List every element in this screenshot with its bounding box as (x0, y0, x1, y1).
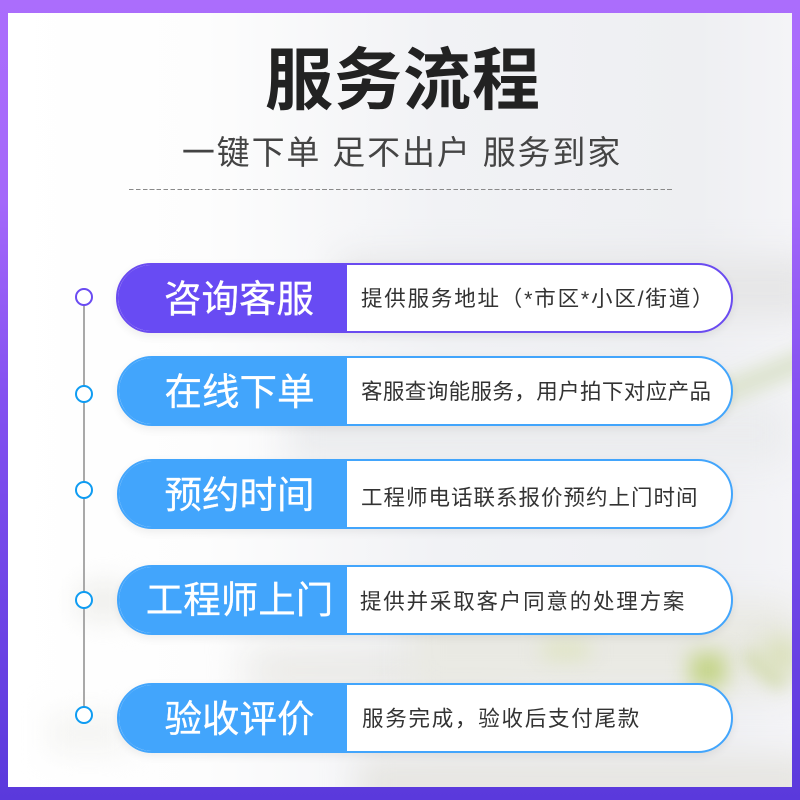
timeline line (83, 296, 85, 716)
timeline node 3 (75, 481, 93, 499)
timeline node 5 (75, 706, 93, 724)
timeline node 4 (75, 591, 93, 609)
step 5 label (117, 683, 347, 753)
step 1 label (116, 263, 347, 333)
step 1 label: 咨询客服 (164, 278, 314, 320)
title: 服务流程 (265, 43, 541, 119)
step 2 label (117, 356, 347, 426)
dashed divider (129, 189, 674, 190)
step 5 description: 服务完成，验收后支付尾款 (362, 707, 641, 731)
step 4 description: 提供并采取客户同意的处理方案 (360, 590, 686, 614)
step 1 description: 提供服务地址（*市区*小区/街道） (361, 287, 715, 311)
step 3 label (117, 459, 347, 529)
timeline (75, 288, 93, 724)
step 2: 在线下单 (117, 356, 733, 426)
subtitle: 一键下单 足不出户 服务到家 (182, 134, 622, 171)
step 2 description: 客服查询能服务，用户拍下对应产品 (361, 380, 711, 404)
step 3 description: 工程师电话联系报价预约上门时间 (361, 486, 699, 510)
step 3 label: 预约时间 (164, 474, 314, 516)
step 1: 咨询客服 (116, 263, 733, 333)
timeline node 2 (75, 385, 93, 403)
step 5: 验收评价 (117, 683, 733, 753)
step 3: 预约时间 (117, 459, 733, 529)
step 4: 工程师上门 (117, 565, 733, 635)
step 2 label: 在线下单 (164, 371, 314, 413)
timeline node 1 (75, 288, 93, 306)
step 4 label (117, 565, 347, 635)
step 5 label: 验收评价 (164, 698, 314, 740)
step 4 label: 工程师上门 (146, 579, 333, 621)
